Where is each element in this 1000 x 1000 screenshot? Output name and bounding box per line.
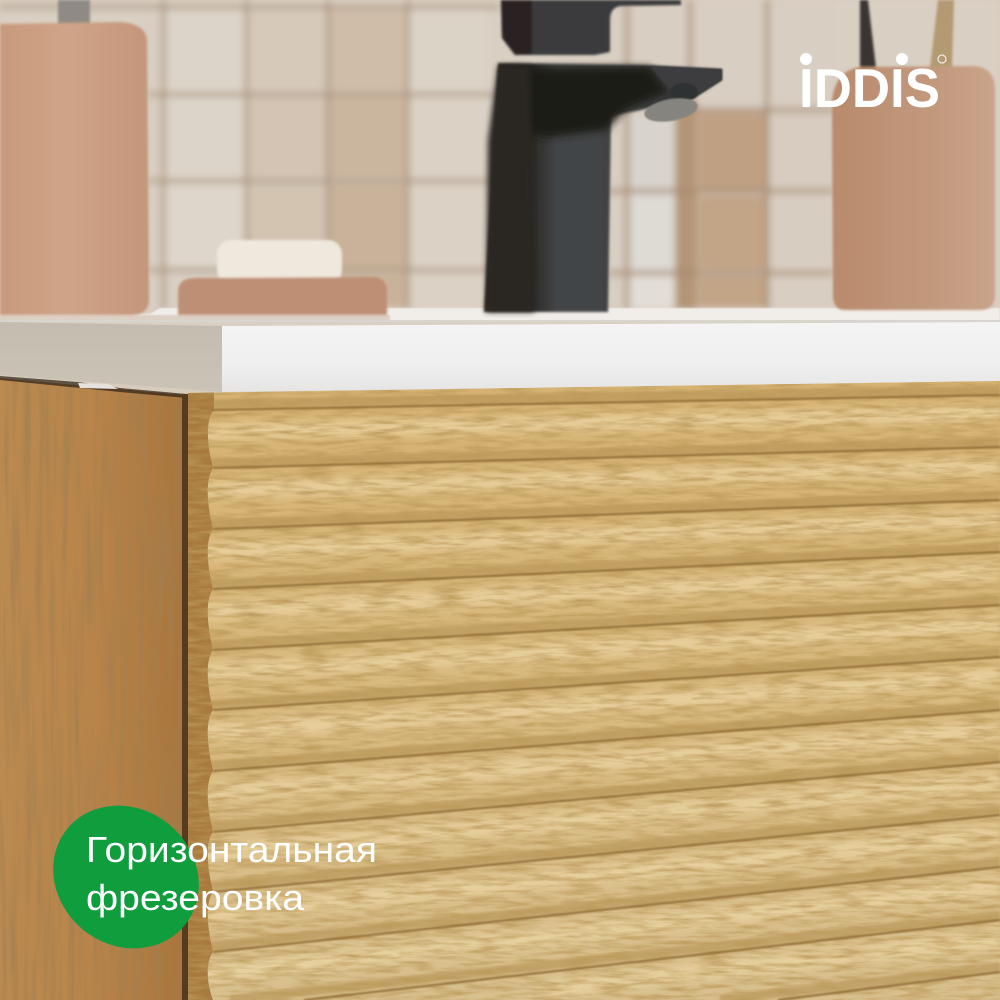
toothbrush cup bbox=[832, 0, 995, 310]
wood side panel bbox=[0, 378, 184, 1000]
green blob bbox=[24, 776, 228, 978]
soap dish with soap bbox=[178, 240, 387, 315]
caption bbox=[86, 829, 377, 918]
soap dispenser bbox=[0, 0, 149, 315]
black faucet bbox=[484, 0, 722, 312]
countertop front edge bbox=[0, 321, 1000, 392]
caption: фрезеровка bbox=[86, 877, 305, 918]
handle glint bbox=[78, 383, 118, 389]
gap between panels bbox=[182, 394, 188, 1000]
caption: Горизонтальная bbox=[86, 829, 377, 870]
background: tiled wall bbox=[0, 0, 1000, 340]
shadow under countertop bbox=[0, 376, 187, 398]
logo: IDDIS bbox=[799, 57, 940, 119]
milled wood front bbox=[188, 380, 1000, 1000]
countertop surface bbox=[0, 308, 1000, 321]
scalloped front edge bbox=[188, 392, 214, 1000]
